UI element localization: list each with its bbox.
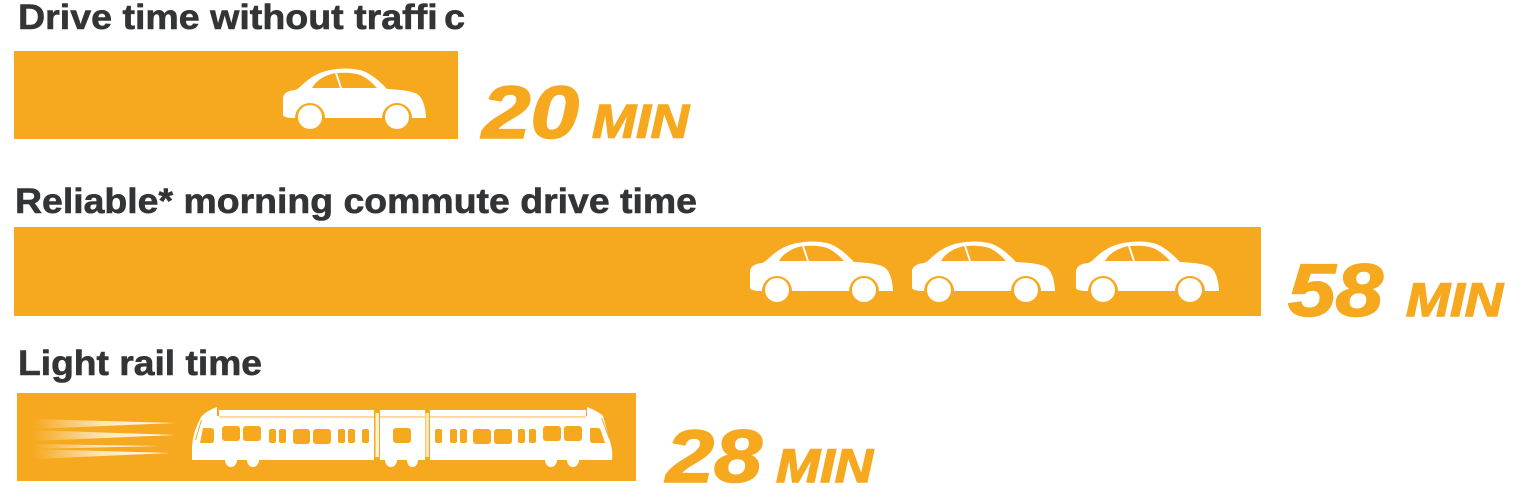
heading: reliable morning commute drive time: Reliable* morning commute drive time xyxy=(15,182,697,221)
value: 58 min: 58 xyxy=(1288,249,1384,332)
left car xyxy=(192,407,374,460)
bar: drive time without traffic xyxy=(14,51,458,139)
value: 20 min xyxy=(480,71,690,154)
wheels xyxy=(225,460,579,467)
bar: reliable morning commute drive time xyxy=(14,227,1261,316)
left connector xyxy=(376,413,379,457)
icon: light rail train xyxy=(192,407,612,467)
value: 20 min: 20 xyxy=(480,71,579,154)
bar: light rail time xyxy=(17,393,636,481)
heading: light rail time: Light rail time xyxy=(18,344,262,383)
right car xyxy=(430,407,612,460)
icon: speed streaks xyxy=(33,419,175,459)
value: 58 min xyxy=(1288,249,1504,332)
value: 28 min: MIN xyxy=(776,439,874,492)
middle car xyxy=(380,410,425,460)
windows xyxy=(195,416,610,444)
icon: car xyxy=(283,68,426,129)
value: 28 min: 28 xyxy=(664,415,763,498)
right connector xyxy=(426,413,429,457)
value: 58 min: MIN xyxy=(1406,273,1504,326)
icon: three cars xyxy=(750,242,1219,302)
value: 20 min: MIN xyxy=(592,94,690,148)
value: 28 min xyxy=(664,415,874,498)
